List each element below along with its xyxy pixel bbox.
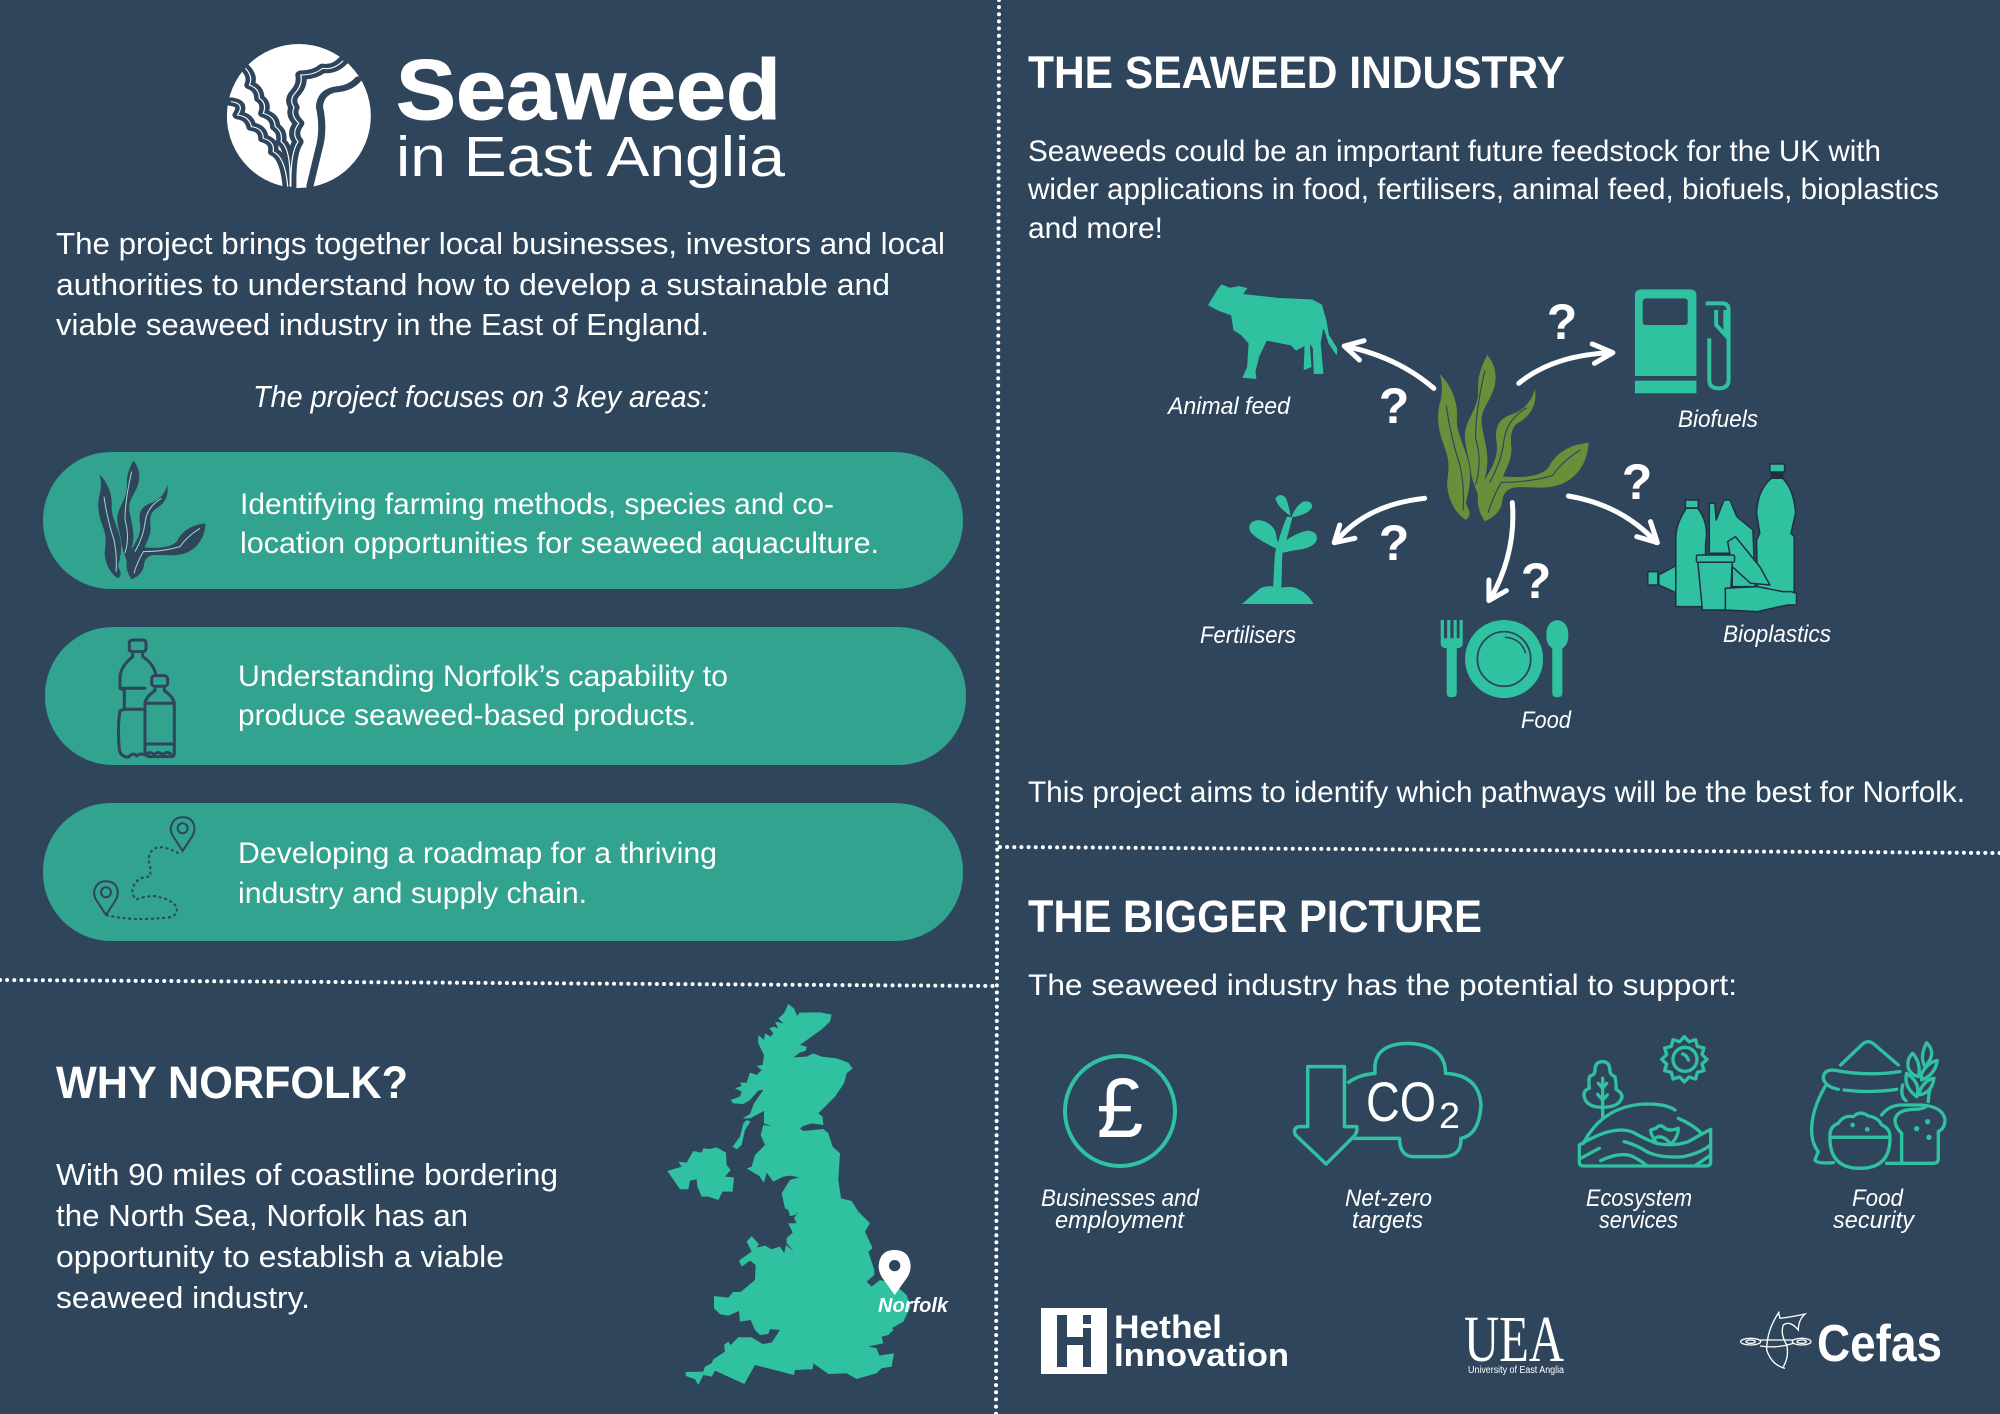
label: biofuels: Biofuels [1678, 406, 1758, 433]
icon: pound sign in circle: £ [1097, 1061, 1143, 1155]
label: fertilisers: Fertilisers [1200, 622, 1296, 649]
label: food security [1833, 1185, 1916, 1234]
diagram: seaweed pathways [1166, 285, 1831, 734]
logo: Cefas: Cefas [1817, 1315, 1942, 1373]
logo: Cefas [1741, 1312, 1942, 1373]
label: ecosystem services: services [1599, 1207, 1678, 1234]
label: animal feed: Animal feed [1166, 393, 1291, 420]
heading: why Norfolk: WHY NORFOLK? [56, 1057, 408, 1108]
icon: pound sign in circle [1065, 1056, 1175, 1166]
intro text [56, 226, 945, 342]
icon: CO2 cloud and arrow [1294, 1043, 1481, 1164]
text: Understanding Norfolk’s capability to [238, 660, 728, 693]
intro text: The project brings together local businesses, investors and local [56, 226, 945, 261]
icon: sprout [1242, 495, 1317, 604]
icon: plastic bottles [1648, 464, 1797, 612]
title [396, 43, 785, 189]
text: seaweed industry [1027, 135, 1939, 245]
text [240, 488, 879, 560]
text [238, 660, 728, 732]
icon: green seaweed [1438, 355, 1589, 521]
text: why Norfolk: opportunity to establish a viable [56, 1239, 504, 1274]
title: in East Anglia [396, 125, 785, 189]
text [238, 837, 717, 910]
question marks: ? [1547, 294, 1577, 350]
logo: Hethel Innovation: Hethel [1114, 1309, 1222, 1345]
heading: the bigger picture: THE BIGGER PICTURE [1028, 891, 1482, 942]
logo icon: seaweed in white circle [227, 44, 371, 188]
panel: roadmap [43, 803, 963, 941]
text: seaweed industry: wider applications in food, fertilisers, animal feed, biofuels, bioplastics [1027, 173, 1939, 206]
text: project aim: This project aims to identify which pathways will be the best for Norfolk. [1028, 776, 1965, 809]
text: why Norfolk: With 90 miles of coastline bordering [56, 1157, 558, 1192]
label: food: Food [1521, 707, 1572, 734]
question marks: ? [1622, 454, 1652, 510]
icon: bottles [118, 640, 174, 757]
label: net-zero targets: targets [1352, 1207, 1423, 1234]
text: location opportunities for seaweed aquaculture. [240, 527, 879, 560]
label: net-zero targets [1345, 1185, 1432, 1234]
icon: seaweed [98, 461, 206, 579]
text: seaweed industry: Seaweeds could be an important future feedstock for the UK with [1028, 135, 1881, 168]
logo: Hethel Innovation [1041, 1308, 1289, 1374]
panel: Norfolk capability [45, 627, 966, 765]
intro text: viable seaweed industry in the East of England. [56, 307, 709, 342]
icon: cow [1209, 285, 1336, 378]
text: seaweed industry: and more! [1028, 212, 1163, 245]
label: businesses and employment: Businesses and [1041, 1185, 1200, 1212]
text: why Norfolk: seaweed industry. [56, 1280, 310, 1315]
text: industry and supply chain. [238, 877, 587, 910]
question marks [1379, 294, 1652, 609]
logo: University of East Anglia: University of East Anglia [1468, 1365, 1564, 1376]
logo: University of East Anglia: UEA [1464, 1303, 1564, 1376]
label: ecosystem services: Ecosystem [1586, 1185, 1692, 1212]
text: bigger picture intro: The seaweed industry has the potential to support: [1028, 969, 1737, 1002]
heading: the seaweed industry: THE SEAWEED INDUSTRY [1028, 47, 1565, 98]
icon: food security [1812, 1042, 1945, 1168]
label: Norfolk: Norfolk [878, 1295, 949, 1317]
UK map [667, 1004, 949, 1385]
sub-heading: key areas: The project focuses on 3 key areas: [253, 379, 709, 414]
text: produce seaweed-based products. [238, 699, 696, 732]
label: businesses and employment: employment [1055, 1207, 1185, 1234]
label: food security: Food [1852, 1185, 1904, 1212]
question marks: ? [1379, 378, 1409, 434]
question marks: ? [1379, 515, 1409, 571]
text: why Norfolk: the North Sea, Norfolk has an [56, 1198, 468, 1233]
icon: CO2 cloud and arrow: 2 [1439, 1095, 1460, 1136]
icon: map route [94, 817, 194, 919]
panel: farming methods [43, 452, 963, 589]
label: net-zero targets: Net-zero [1345, 1185, 1432, 1212]
label: businesses and employment [1041, 1185, 1200, 1234]
icon: fuel pump [1635, 289, 1729, 393]
text: Identifying farming methods, species and co- [240, 488, 834, 521]
icon: CO2 cloud and arrow: CO [1366, 1070, 1436, 1133]
icon: location pin [879, 1250, 911, 1295]
label: food security: security [1833, 1207, 1916, 1234]
label: ecosystem services [1586, 1185, 1692, 1234]
label: bioplastics: Bioplastics [1723, 621, 1831, 648]
question marks: ? [1521, 553, 1551, 609]
title: Seaweed [396, 43, 781, 138]
logo: Hethel Innovation: Innovation [1114, 1337, 1289, 1373]
icon: plate and cutlery [1441, 620, 1568, 698]
arrows [1334, 341, 1657, 601]
text: Developing a roadmap for a thriving [238, 837, 717, 870]
intro text: authorities to understand how to develop a sustainable and [56, 267, 890, 302]
text: why Norfolk [56, 1157, 558, 1315]
icon: ecosystem landscape [1579, 1037, 1711, 1166]
